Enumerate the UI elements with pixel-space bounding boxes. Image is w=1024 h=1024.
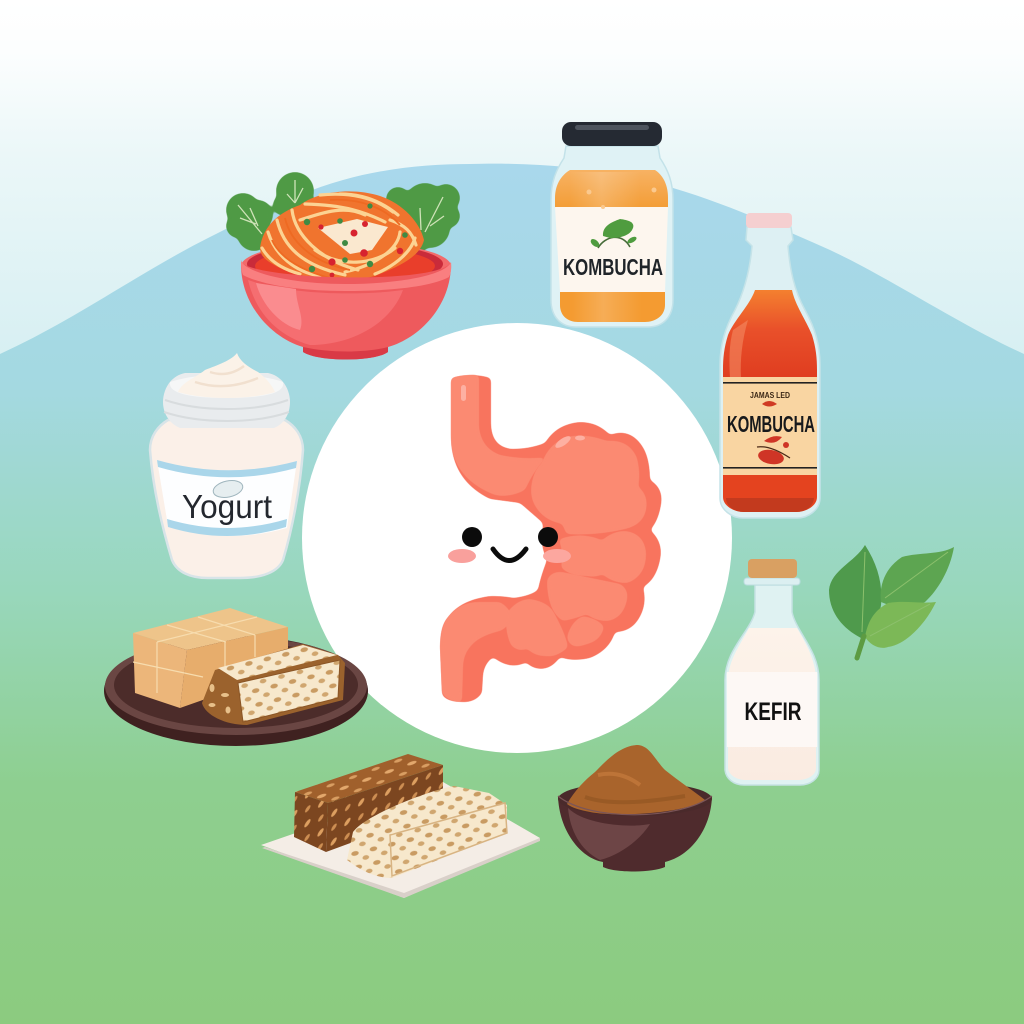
- brown tempeh: [294, 754, 443, 852]
- food: kombucha bottle: [720, 213, 820, 518]
- food: kombucha jar: [551, 122, 673, 327]
- jar neck rings: [163, 373, 290, 428]
- bowl back and sauce: [241, 242, 451, 290]
- food: yogurt jar: [150, 353, 303, 578]
- yogurt swirl: [178, 353, 275, 398]
- kimchi leaves: [226, 172, 460, 252]
- yogurt label: [157, 460, 297, 536]
- food: miso bowl: [558, 745, 712, 872]
- light tempeh: [347, 786, 507, 878]
- gut face: [448, 527, 571, 563]
- tempeh slice: [202, 644, 345, 725]
- tofu piece: [318, 219, 388, 254]
- bowl rim: [241, 260, 451, 291]
- food: kefir bottle: KEFIR: [744, 698, 802, 726]
- bowl body: [241, 262, 451, 360]
- chili drawing: [757, 436, 790, 466]
- food: tempeh on plate: [261, 754, 540, 898]
- food: kombucha jar: KOMBUCHA: [563, 254, 663, 280]
- icon: smiling gut: [440, 375, 662, 702]
- central white circle: [302, 323, 732, 753]
- tofu block: [133, 608, 288, 708]
- food: kefir bottle: [725, 559, 819, 785]
- bottle label: JAMAS LED: [750, 391, 790, 400]
- plate: [104, 636, 368, 746]
- jar body: [150, 420, 303, 578]
- yogurt label: Yogurt: [182, 488, 272, 525]
- miso paste: [567, 745, 705, 814]
- food: kimchi bowl: [226, 172, 460, 360]
- jar herb icon: [589, 219, 638, 249]
- bottle label: [723, 377, 817, 475]
- food: tofu and tempeh plate: [104, 608, 368, 746]
- kimchi noodles: [260, 191, 424, 280]
- icon: green leaves: [829, 545, 954, 658]
- bottle label: KOMBUCHA: [727, 411, 815, 437]
- jar lid: [562, 122, 662, 146]
